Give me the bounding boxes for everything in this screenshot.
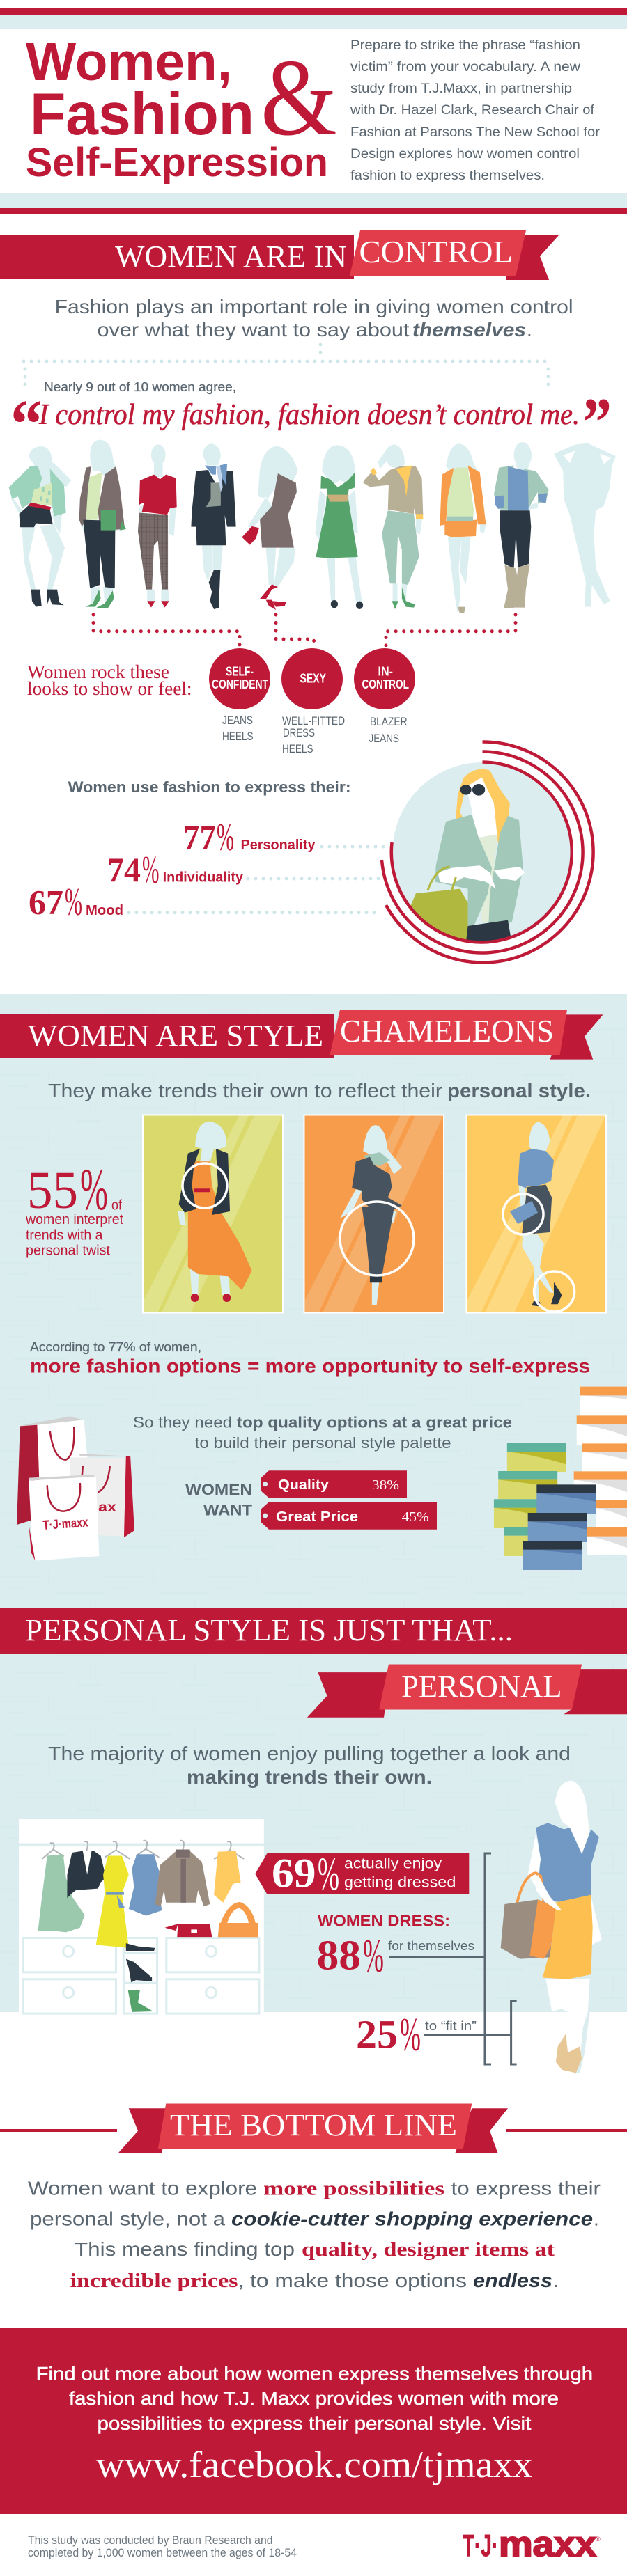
quote: ”: [582, 384, 612, 461]
stat: 55%: [25, 1156, 123, 1259]
intro statement: Fashion plays an important role in giving women control: [55, 296, 573, 317]
intro statement: [55, 296, 573, 340]
women want label: [185, 1481, 253, 1519]
quote: I control my fashion, fashion doesn’t control me.: [38, 399, 580, 431]
personal statement: [48, 1743, 571, 1788]
stat: 88%: 88: [317, 1932, 361, 1978]
stat: 55%: 55: [27, 1161, 78, 1220]
look items: HEELS: [222, 730, 254, 743]
looks label: Women rock these: [27, 661, 169, 682]
title: &: [261, 37, 337, 159]
hanging clothes: [38, 1850, 241, 1948]
stat: 25%: %: [400, 2008, 421, 2061]
bottom line paragraph: to make those options: [250, 2270, 467, 2291]
look circle: in-control: [354, 648, 415, 709]
banner: women are style chameleons: CHAMELEONS: [340, 1014, 554, 1049]
look items: BLAZER: [370, 716, 408, 728]
quality statement: top quality options at a great price: [237, 1414, 512, 1431]
tag: 69%: actually enjoy: [344, 1856, 442, 1871]
banner: women are in control: WOMEN ARE IN: [115, 239, 347, 274]
chameleons statement: [48, 1080, 591, 1101]
stat: 67% mood: Mood: [86, 903, 123, 918]
women dress label: WOMEN DRESS:: [318, 1912, 450, 1930]
style panel 2: [304, 1115, 444, 1313]
header: bottom bars: [0, 193, 627, 214]
stat dotted leaders: [129, 847, 384, 913]
look items: WELL-FITTED: [282, 715, 345, 728]
options statement: more fashion options = more opportunity to self-express: [30, 1356, 590, 1377]
tag: great price: [261, 1502, 437, 1530]
intro text: Fashion at Parsons The New School for: [350, 125, 601, 140]
bottom line paragraph: .: [594, 2208, 599, 2229]
call to action panel: possibilities to express their personal style. Visit: [98, 2413, 532, 2434]
bottom line paragraph: to express their: [451, 2178, 601, 2199]
tag: quality: 38%: [372, 1477, 399, 1493]
figure 10 silhouette: [554, 443, 616, 607]
women want label: WANT: [203, 1502, 253, 1519]
stacked boxes: [494, 1387, 627, 1570]
look circle: in-control: IN-: [378, 665, 393, 679]
figure 8: [440, 443, 486, 613]
stat: 55%: of: [111, 1198, 122, 1214]
title: Fashion: [30, 81, 254, 148]
style panel 3: [467, 1115, 606, 1313]
quality statement: to build their personal style palette: [195, 1434, 451, 1452]
stat: 74% individuality: Individuality: [163, 870, 244, 886]
header: top bars: [0, 8, 627, 29]
bottom line paragraph: This means finding top: [75, 2238, 295, 2260]
footnote: This study was conducted by Braun Research and: [28, 2534, 273, 2547]
banner: the bottom line: [0, 2104, 627, 2153]
section 3 background: [0, 1654, 627, 2012]
stat: 74% individuality: [107, 849, 244, 892]
look circle: sexy: [281, 648, 343, 709]
look items: DRESS: [283, 727, 315, 739]
intro text: [350, 38, 601, 183]
tag: 69%: 69: [272, 1850, 316, 1896]
section 2 background: [0, 994, 627, 1608]
title: Women,: [26, 32, 232, 92]
banner: women are in control: CONTROL: [359, 235, 513, 269]
banner: personal: [307, 1664, 627, 1718]
chameleons statement: They make trends their own to reflect their: [48, 1080, 442, 1101]
intro statement: .: [527, 319, 532, 340]
call to action panel: fashion and how T.J. Maxx provides women with more: [69, 2388, 559, 2409]
bottom line paragraph: quality, designer items at: [302, 2239, 555, 2261]
stat: 88%: [317, 1929, 474, 1981]
quality statement: [133, 1414, 512, 1452]
brackets and leader lines: [389, 1853, 517, 2064]
intro text: with Dr. Hazel Clark, Research Chair of: [350, 102, 595, 118]
look items: JEANS: [222, 714, 253, 727]
banner: personal: PERSONAL: [401, 1670, 562, 1704]
look items: [222, 714, 408, 755]
intro statement: over what they want to say about: [98, 319, 410, 340]
T.J.Maxx logo: ®: [596, 2536, 601, 2543]
title: [26, 32, 337, 185]
section 3 red band: [0, 1608, 627, 1654]
hangers: [42, 1841, 244, 1859]
banner: women are style chameleons: [0, 1010, 603, 1060]
stat: 88%: for themselves: [388, 1939, 474, 1953]
bottom line paragraph: Women want to explore: [28, 2178, 257, 2199]
closet illustration: [19, 1819, 264, 2013]
women want label: WOMEN: [185, 1481, 252, 1498]
bottom line paragraph: [28, 2178, 601, 2292]
look items: HEELS: [282, 743, 314, 755]
tag: 69%: %: [318, 1847, 339, 1900]
stat: 25%: 25: [356, 2012, 398, 2057]
chameleons statement: personal style.: [447, 1080, 591, 1101]
shopping bags: [17, 1416, 134, 1561]
quote: [10, 379, 612, 462]
figure 2: [79, 440, 126, 608]
stat: 55%: women interpret: [25, 1212, 123, 1227]
figure 3: [138, 444, 177, 608]
call to action panel: [0, 2328, 627, 2514]
intro text: fashion to express themselves.: [350, 168, 545, 183]
bottom line paragraph: ,: [238, 2270, 244, 2291]
closet bag and clutch: [164, 1902, 258, 1937]
express heading: Women use fashion to express their:: [68, 778, 351, 796]
T.J.Maxx logo: maxx: [499, 2524, 596, 2563]
closet drawers: [23, 1938, 259, 2013]
intro statement: themselves: [412, 319, 526, 340]
figure 1: [9, 446, 71, 607]
look circle: self-confident: SELF-: [226, 665, 254, 679]
figure 6: [315, 445, 363, 609]
bottom line paragraph: incredible prices: [70, 2270, 238, 2292]
look circle: sexy: SEXY: [300, 672, 326, 686]
stat: 77% personality: [183, 816, 316, 859]
options statement: According to 77% of women,: [30, 1340, 201, 1354]
bottom line paragraph: personal style, not a: [30, 2208, 225, 2229]
intro text: Design explores how women control: [350, 146, 580, 162]
banner: women are style chameleons: WOMEN ARE STYLE: [28, 1019, 323, 1053]
bottom line paragraph: .: [553, 2270, 559, 2291]
stat: 55%: %: [80, 1156, 108, 1223]
call to action panel: Find out more about how women express themselves through: [36, 2364, 593, 2385]
section 3 red band: PERSONAL STYLE IS JUST THAT...: [25, 1613, 513, 1647]
stat: 25%: to “fit in”: [425, 2019, 477, 2033]
intro text: Prepare to strike the phrase “fashion: [350, 38, 580, 53]
T.J.Maxx logo: [463, 2524, 601, 2563]
closet shoes: [126, 1943, 155, 2012]
dotted quote frame: [24, 345, 550, 386]
figures row: [9, 440, 616, 613]
stat: 74% individuality: %: [142, 849, 159, 892]
stat: 77% personality: %: [217, 816, 234, 859]
stat: 74% individuality: 74: [107, 850, 141, 889]
banner: women are in control: [0, 230, 559, 280]
look circle: self-confident: CONFIDENT: [212, 677, 268, 691]
tag: 69%: [255, 1847, 469, 1900]
quote: Nearly 9 out of 10 women agree,: [44, 379, 236, 394]
tag: great price: 45%: [402, 1509, 429, 1525]
personal statement: making trends their own.: [187, 1766, 432, 1788]
bottom line paragraph: endless: [473, 2270, 552, 2291]
stat: 67% mood: %: [65, 881, 82, 924]
looks label: [27, 661, 192, 699]
figure 5: [242, 446, 298, 610]
figure 4: [191, 443, 236, 609]
stat: 25%: [356, 2008, 477, 2061]
intro text: victim” from your vocabulary. A new: [350, 59, 581, 74]
bottom line paragraph: cookie-cutter shopping experience: [231, 2208, 593, 2229]
circle woman illustration: [382, 741, 594, 962]
look circle: self-confident: [209, 648, 270, 709]
quality statement: So they need: [133, 1414, 232, 1431]
options statement: [30, 1340, 590, 1377]
quote: “: [10, 385, 42, 462]
figure 7: [363, 444, 423, 609]
bottom line paragraph: more possibilities: [263, 2178, 444, 2200]
tag: 69%: getting dressed: [344, 1874, 456, 1890]
title: Self-Expression: [26, 140, 328, 185]
look items: JEANS: [369, 732, 399, 745]
tag: quality: [261, 1470, 407, 1498]
call to action panel: www.facebook.com/tjmaxx: [96, 2444, 533, 2485]
style panel 1: [143, 1115, 283, 1313]
looks label: looks to show or feel:: [27, 678, 192, 699]
banner: the bottom line: THE BOTTOM LINE: [170, 2108, 457, 2142]
figure 9: [494, 442, 549, 608]
stat: 55%: trends with a: [26, 1228, 103, 1243]
stat: 67% mood: [29, 881, 123, 924]
intro text: study from T.J.Maxx, in partnership: [350, 81, 572, 96]
stat: 77% personality: 77: [183, 817, 216, 856]
red dotted connectors: [93, 615, 516, 647]
footnote: completed by 1,000 women between the ages of 18-54: [28, 2546, 297, 2559]
stat: 88%: %: [363, 1929, 384, 1981]
personal statement: The majority of women enjoy pulling together a look and: [48, 1743, 571, 1764]
shopping bags: T·J·maxx: [42, 1515, 89, 1533]
look circle: in-control: CONTROL: [362, 677, 409, 691]
woman with bag illustration: [501, 1781, 602, 2074]
footnote: [28, 2534, 297, 2559]
tag: great price: Great Price: [276, 1509, 358, 1525]
stat: 67% mood: 67: [29, 883, 63, 922]
stat: 55%: personal twist: [26, 1243, 110, 1259]
stat: 77% personality: Personality: [241, 838, 316, 853]
tag: quality: Quality: [278, 1477, 330, 1493]
T.J.Maxx logo: T·J·: [463, 2529, 498, 2563]
shopping bags: ax: [98, 1500, 117, 1515]
